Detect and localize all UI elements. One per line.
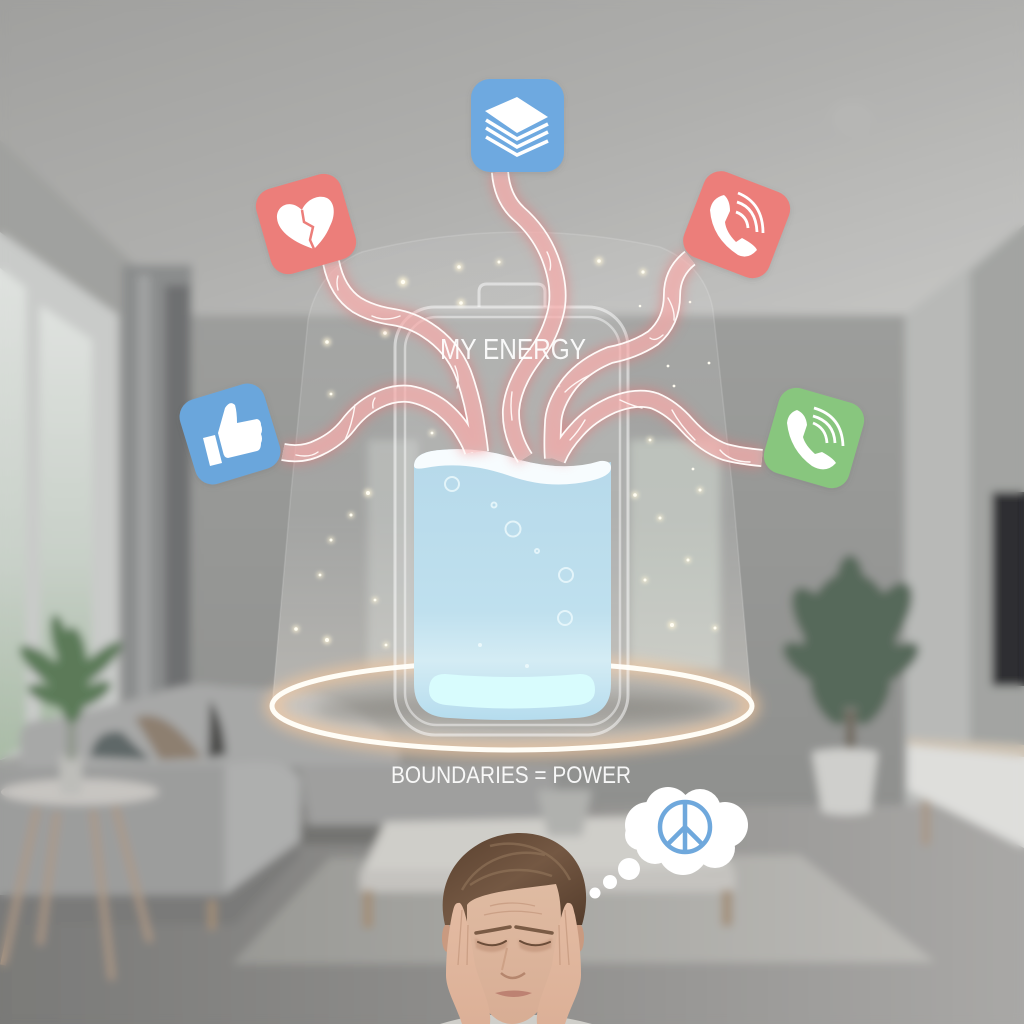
- icon: broken heart app: [252, 170, 360, 278]
- icon: stacked layers app: [471, 79, 564, 172]
- face: [467, 884, 561, 1024]
- tendril veins: [296, 252, 750, 462]
- plant right: [776, 555, 926, 730]
- right hand: [537, 903, 581, 1024]
- ring inner shadow: [313, 692, 723, 726]
- sofa: [20, 684, 400, 770]
- shirt: [440, 1015, 592, 1024]
- face shading: [475, 938, 552, 952]
- mouth: [495, 990, 532, 997]
- hair: [443, 833, 586, 925]
- thought bubble with peace sign: [590, 787, 748, 898]
- icon: thumbs up app: [175, 379, 285, 489]
- glass dome: [272, 232, 752, 750]
- battery outline: [395, 284, 628, 735]
- plant left: [13, 613, 127, 723]
- icon: green phone app: [760, 384, 868, 492]
- side table: [3, 806, 150, 980]
- eyebrows: [476, 927, 552, 933]
- nose: [501, 973, 525, 978]
- floating light particles: [292, 257, 718, 648]
- energy liquid in battery: [414, 449, 611, 720]
- rug: [232, 855, 935, 964]
- ears: [442, 924, 452, 952]
- stressed person: [440, 833, 592, 1024]
- liquid glow base: [429, 674, 595, 708]
- eyes closed: [478, 941, 550, 945]
- tv and console: [992, 492, 1024, 686]
- icon: red phone app: [678, 166, 795, 283]
- boundary ring: [272, 662, 752, 750]
- icon: peace symbol: [660, 802, 710, 852]
- bubbles: [445, 477, 573, 625]
- tendril body: [283, 172, 762, 460]
- hair strands: [462, 844, 570, 890]
- forehead wrinkles: [484, 903, 542, 915]
- energy-draining tendrils: [278, 172, 766, 472]
- heading: my energy: MY ENERGY: [440, 334, 586, 366]
- left hand: [446, 903, 490, 1024]
- coffee table: [360, 816, 735, 876]
- label: boundaries = power: BOUNDARIES = POWER: [391, 762, 631, 789]
- tendril glow: [283, 172, 762, 460]
- tendril edges: [281, 172, 763, 467]
